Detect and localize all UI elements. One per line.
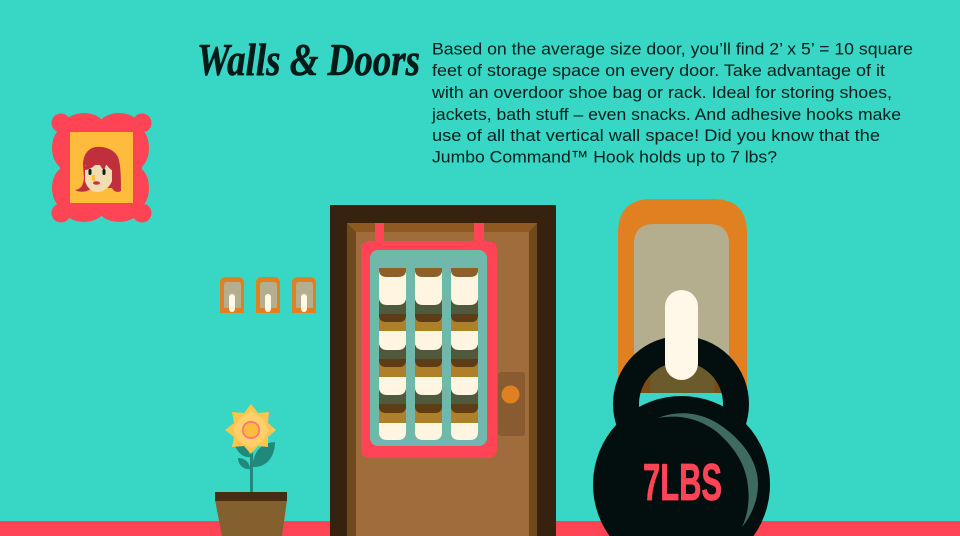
small adhesive hooks row <box>220 277 316 313</box>
body text: feet of storage space on every door. Take advantage of it <box>432 61 885 80</box>
plate shadow behind handle <box>636 356 728 393</box>
door lintel <box>347 223 537 232</box>
body text: with an overdoor shoe bag or rack. Ideal for storing shoes, <box>431 83 892 102</box>
title: Walls & Doors <box>197 35 420 85</box>
hook back plate <box>618 199 747 393</box>
large hook holding kettlebell <box>593 199 770 536</box>
portrait face and hair <box>75 147 121 192</box>
hook plate inner <box>634 224 729 393</box>
weight label: 7LBS <box>643 454 722 512</box>
kettlebell body <box>593 396 770 536</box>
potted flower <box>215 404 287 536</box>
flower pot <box>215 492 287 536</box>
small hook 1 <box>220 277 244 313</box>
door handle <box>498 372 525 436</box>
pocket column 1 <box>379 268 406 440</box>
bag inner <box>370 250 487 446</box>
body text: Based on the average size door, you’ll find 2’ x 5’ = 10 square <box>432 40 913 58</box>
door jambs <box>347 223 537 536</box>
body text: use of all that vertical wall space! Did you know that the <box>432 126 880 145</box>
kettlebell handle <box>626 349 736 459</box>
pocket column 3 <box>451 268 478 440</box>
body text: Jumbo Command™ Hook holds up to 7 lbs? <box>432 148 777 166</box>
door <box>330 205 556 536</box>
bag straps <box>375 223 384 243</box>
flower head <box>225 404 276 454</box>
small hook 3 <box>292 277 316 313</box>
body text: jackets, bath stuff – even snacks. And adhesive hooks make <box>431 105 901 124</box>
body text <box>431 40 913 166</box>
overdoor shoe bag <box>361 223 497 458</box>
yellow picture background <box>70 132 133 203</box>
red floor <box>0 521 960 536</box>
leaves <box>233 440 275 469</box>
kettlebell highlight <box>658 413 758 527</box>
scalloped frame <box>52 113 152 222</box>
small hook 2 <box>256 277 280 313</box>
door frame <box>330 205 556 536</box>
white hook arm <box>665 290 698 380</box>
door panel <box>356 232 529 536</box>
picture frame with portrait <box>52 113 152 222</box>
pocket column 2 <box>415 268 442 440</box>
bag border <box>361 241 497 458</box>
stem <box>250 450 253 493</box>
